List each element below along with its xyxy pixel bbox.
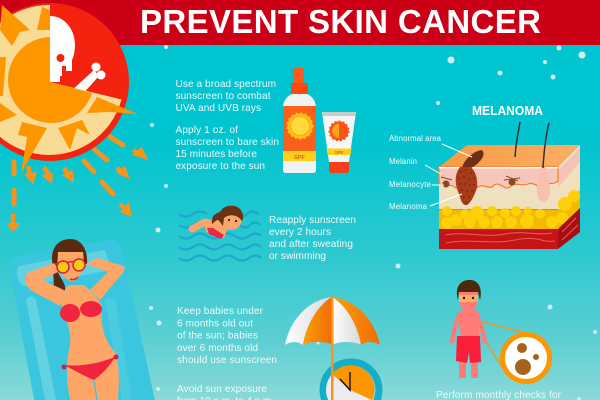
melanoma labels: Melanin: [389, 157, 417, 166]
clock ring: [323, 362, 379, 400]
text: apply sunscreen: [176, 125, 279, 172]
sun with skull: [0, 3, 138, 173]
cap: [291, 83, 308, 94]
red disc: [0, 3, 129, 161]
text: keep babies out of the sun: over 6 months old: [177, 343, 258, 354]
text: keep babies out of the sun: [177, 306, 277, 366]
arms: [25, 258, 125, 306]
melanoma heading: MELANOMA: [472, 104, 543, 118]
text: keep babies out of the sun: should use sunscreen: [177, 355, 277, 366]
text: apply sunscreen: exposure to the sun: [176, 161, 265, 172]
float pillow highlight: [17, 250, 112, 286]
epidermis: [439, 167, 558, 189]
sun spikes: [0, 5, 138, 173]
man with mole callout: [452, 280, 550, 382]
canopy left orange: [303, 297, 332, 345]
melanoma spot on surface: [462, 150, 484, 169]
orange sun core: [8, 37, 92, 123]
text: avoid sun exposure: Avoid sun exposure: [177, 384, 267, 395]
skull: [50, 16, 75, 82]
hair: [52, 239, 87, 294]
icon: sunscreen spray bottle: [283, 68, 316, 173]
text: keep babies out of the sun: Keep babies under: [177, 306, 264, 317]
bikini top: [60, 301, 102, 322]
hair follicle: [537, 167, 550, 202]
face: [58, 252, 84, 281]
magnifier lines: [483, 322, 523, 367]
fat layer: [439, 190, 580, 232]
canopy right white: [332, 297, 361, 345]
shorts: [456, 336, 481, 363]
face: [220, 208, 242, 230]
tube crimp: [322, 112, 356, 116]
text: reapply sunscreen: every 2 hours: [269, 227, 331, 238]
text: reapply sunscreen: and after sweating: [269, 239, 353, 250]
arm: [192, 222, 218, 229]
text: reapply sunscreen: Reapply sunscreen: [269, 215, 356, 226]
text: keep babies out of the sun: 6 months old out: [177, 318, 253, 330]
clock hands: [340, 372, 350, 390]
muscle side: [558, 208, 580, 249]
tube sun: [330, 122, 348, 140]
hair: [457, 280, 481, 300]
text: broad spectrum sunscreen: [176, 79, 276, 114]
arms: [452, 316, 485, 343]
SPF: SPF: [294, 155, 305, 161]
bikini bows: [62, 354, 118, 370]
torso: [457, 309, 480, 336]
skull eye: [56, 54, 64, 62]
eye band: [459, 295, 478, 302]
skin cross-section diagram: [439, 122, 580, 249]
melanoma labels: Melanocyte: [389, 180, 431, 189]
orange label: [283, 106, 316, 151]
eyes: [463, 297, 474, 299]
text: avoid sun exposure: [177, 384, 274, 400]
bottle body: [283, 94, 316, 173]
melanoma labels: Melanoma: [389, 202, 428, 211]
body: [60, 285, 119, 400]
hair strands: [515, 122, 549, 168]
header band: [0, 0, 600, 45]
title: PREVENT SKIN CANCER: [140, 3, 541, 40]
tube band: [326, 148, 352, 155]
text: broad spectrum sunscreen: Use a broad spectrum: [176, 79, 276, 90]
icon: umbrella: [285, 297, 380, 345]
woman on float: [10, 239, 157, 400]
canopy left white: [285, 297, 332, 345]
ray dashes: [14, 137, 123, 204]
muscle layer: [439, 229, 558, 249]
arrow heads: [6, 147, 148, 232]
sun ray arrows: [6, 137, 148, 232]
melanoma labels: Abnormal area: [389, 134, 442, 143]
tube SPF: SPF: [335, 150, 344, 155]
right side epidermis: [558, 148, 580, 188]
text: reapply sunscreen: [269, 215, 356, 262]
arrow shafts: [13, 150, 139, 224]
text: apply sunscreen: Apply 1 oz. of: [176, 125, 238, 136]
bikini bottom: [64, 357, 115, 380]
moles: [515, 343, 539, 375]
text: apply sunscreen: sunscreen to bare skin: [176, 137, 279, 148]
torso: [204, 219, 229, 238]
tube cap: [329, 162, 349, 173]
icon: sunscreen tube: [322, 112, 356, 173]
label leader lines: [425, 144, 472, 206]
dermis: [439, 167, 558, 209]
tube body: [322, 112, 356, 162]
right side face: [558, 145, 580, 232]
clock orange sector: [332, 365, 375, 400]
canopy right orange: [332, 297, 380, 345]
yellow band: [283, 151, 316, 161]
melanoma labels: [389, 134, 442, 211]
icon: swimmer: [179, 206, 261, 260]
leg gap: [94, 380, 97, 400]
waves: [179, 212, 261, 260]
text: apply sunscreen: 15 minutes before: [176, 149, 257, 160]
text: reapply sunscreen: or swimming: [269, 251, 326, 262]
lips: [70, 277, 78, 280]
white surface strip: [439, 167, 558, 168]
text: broad spectrum sunscreen: UVA and UVB rays: [176, 103, 261, 114]
clock face: [326, 366, 374, 400]
bottle sun: [288, 114, 312, 138]
melanoma tumour: [456, 167, 477, 205]
snow dots: [149, 45, 597, 400]
muscle fibres: [445, 218, 578, 243]
swimsuit: [207, 228, 224, 239]
head: [459, 292, 478, 311]
sunglasses: [55, 259, 85, 273]
melanocytes: [441, 176, 520, 188]
cream sun ring: [0, 5, 122, 155]
umbrella pole: [331, 296, 334, 400]
magnifier circle: [502, 334, 550, 382]
hair: [212, 206, 243, 226]
float: [10, 240, 157, 400]
legs: [459, 360, 478, 378]
tumour texture: [458, 169, 475, 203]
top skin surface: [439, 145, 580, 167]
crossbone: [70, 62, 106, 97]
eyes: [228, 219, 237, 222]
text: broad spectrum sunscreen: sunscreen to combat: [176, 91, 271, 102]
text: keep babies out of the sun: of the sun; babies: [177, 330, 258, 342]
float right highlight: [105, 298, 132, 400]
icon: clock: [323, 362, 379, 400]
nozzle: [293, 68, 304, 83]
float side highlight: [26, 297, 56, 400]
